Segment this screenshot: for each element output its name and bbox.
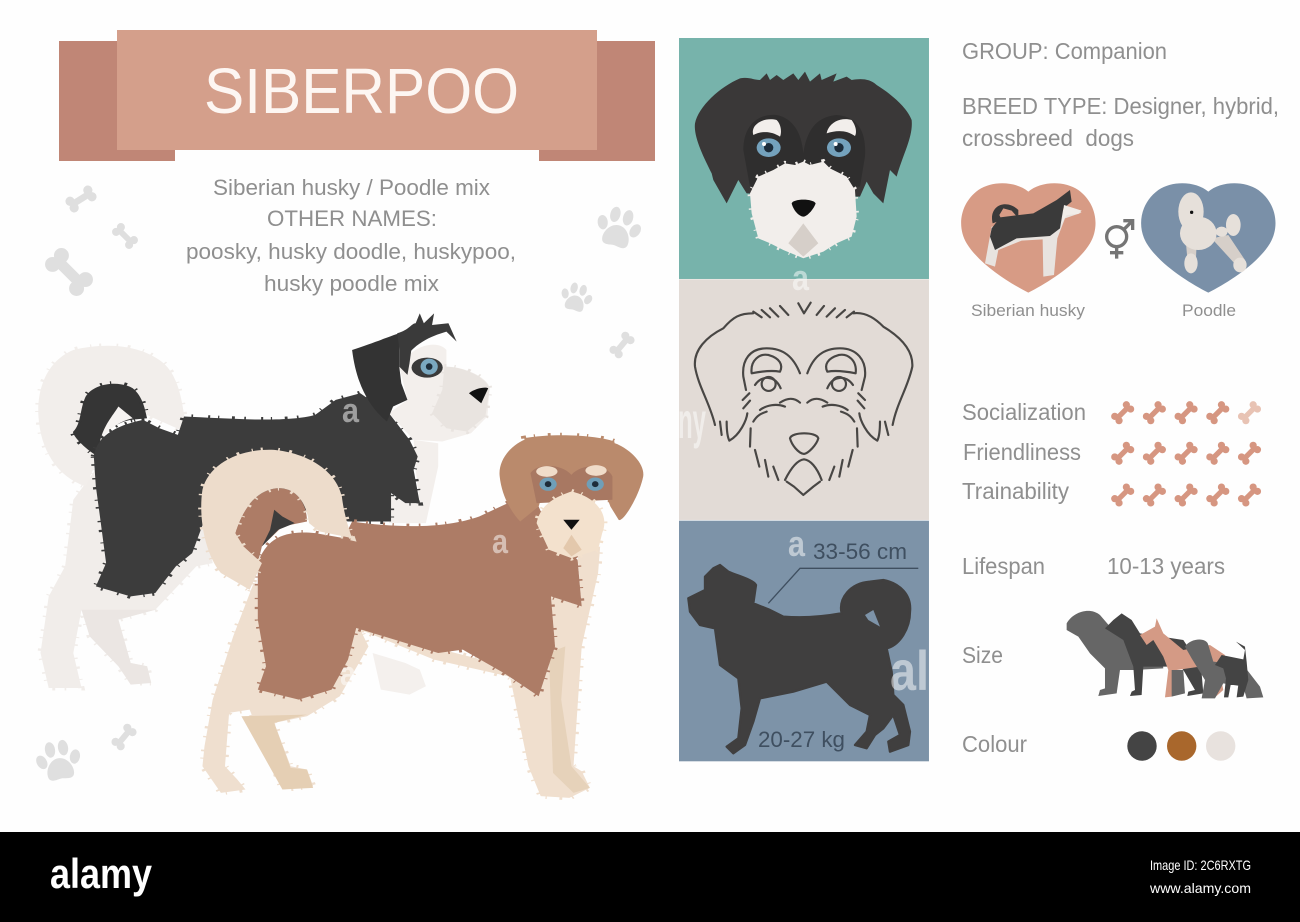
breed description text [186,175,516,296]
watermark glyphs: a [788,523,806,564]
group and breed type: BREED TYPE: Designer, hybrid, [962,93,1279,119]
breed description text: OTHER NAMES: [267,206,437,231]
hind legs and belly [202,583,368,793]
breed description text: Siberian husky / Poodle mix [213,175,490,200]
eyebrows [753,119,781,137]
head [389,345,490,442]
watermark glyphs: a [340,655,357,693]
ears and head [500,438,549,521]
heart: Siberian husky [961,183,1096,293]
heart: Poodle [1141,183,1276,293]
tan dog [201,435,643,798]
group and breed type [962,38,1279,151]
parent label: Poodle: Poodle [1182,301,1236,320]
trait labels: Trainability [962,478,1069,504]
muzzle [750,162,857,258]
bone rating icons [1110,400,1263,508]
breed description text: poosky, husky doodle, huskypoo, [186,239,516,264]
weight label: 20-27 kg [758,727,845,752]
footer logo: alamy [50,850,153,897]
decorative bones and paws [32,184,647,783]
footer image id: Image ID: 2C6RXTG [1150,857,1251,873]
watermark glyphs: ny [678,393,706,449]
panel: colour portrait [679,38,929,279]
outer tail [38,346,188,486]
parent breed hearts [961,183,1276,293]
dog body underside and legs [40,466,213,688]
eyes [757,138,781,157]
title ribbon [59,30,655,161]
inner tail [235,488,307,563]
trait labels: Socialization [962,399,1086,425]
watermark glyphs: a [792,257,810,298]
parent label: Siberian husky: Siberian husky [971,301,1085,320]
footer url: www.alamy.com [1149,880,1251,896]
colour swatches [1127,731,1235,761]
outer tail [201,450,352,590]
trait labels [962,399,1086,504]
panel: line portrait [679,279,929,520]
panel: silhouette with measurements [679,521,929,761]
footer bar [0,832,1300,922]
colour label: Colour [962,731,1027,757]
lifespan: Lifespan [962,553,1045,579]
group and breed type: crossbreed dogs [962,125,1134,151]
husky illustration [985,190,1082,277]
muzzle [537,491,604,558]
group and breed type: GROUP: Companion [962,38,1167,64]
dark coat [94,393,420,596]
face outline [695,303,912,495]
watermark glyphs [340,257,929,702]
lifespan: 10-13 years [1107,553,1225,579]
watermark glyphs: a [492,523,509,561]
inner tail [73,384,147,457]
breed description text: husky poodle mix [264,271,439,296]
icon: gender symbol [1107,221,1133,259]
size comparison silhouettes [1067,611,1263,698]
lifespan [962,553,1225,579]
brown coat [258,503,582,700]
watermark glyphs: al [890,639,929,702]
dog silhouette [688,565,910,753]
trait labels: Friendliness [963,439,1081,465]
title: SIBERPOO [204,55,519,127]
trait ratings [962,399,1263,508]
head fur [695,72,912,203]
height label: 33-56 cm [813,539,907,564]
black and white dog [38,313,490,695]
nose [469,388,488,403]
front legs [356,546,600,798]
poodle illustration [1178,192,1247,273]
watermark glyphs: a [342,392,360,430]
height leader line [768,568,918,603]
size label: Size [962,642,1003,668]
